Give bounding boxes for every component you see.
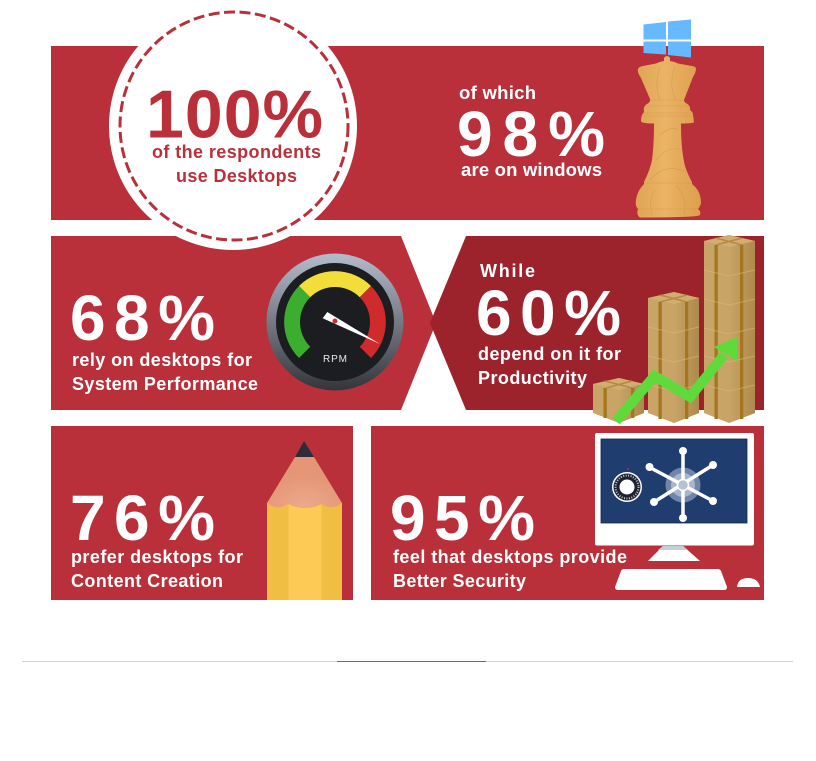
icon: windows logo (644, 20, 691, 58)
icon: stacked boxes (593, 235, 755, 423)
panel: 60% productivity (430, 236, 764, 410)
text: of which: of which (459, 82, 536, 103)
panel: 95% better security (371, 426, 764, 600)
text: Content Creation: Content Creation (71, 571, 223, 591)
text: System Performance: System Performance (72, 374, 258, 394)
arrow: rising green trend (616, 337, 737, 421)
text: prefer desktops for: prefer desktops for (71, 547, 243, 567)
icon: desktop computer with vault (595, 433, 760, 590)
gauge: green arc (284, 286, 310, 358)
footer divider (22, 661, 793, 662)
panel: 98% on windows (51, 20, 764, 220)
icon: pencil (267, 441, 342, 600)
text: Better Security: Better Security (393, 571, 526, 591)
text: Productivity: Productivity (478, 368, 587, 388)
text: use Desktops: use Desktops (176, 166, 297, 186)
gauge: RPM label: RPM (323, 354, 347, 365)
text: of the respondents: of the respondents (152, 142, 321, 162)
vault: wheel (646, 447, 717, 522)
boxes: short stack (593, 378, 644, 423)
stat: 98%: 98% (457, 98, 605, 170)
boxes: medium stack (648, 292, 699, 423)
stat: 100%: 100% (146, 76, 323, 152)
text: are on windows: are on windows (461, 159, 602, 180)
keyboard (615, 569, 727, 590)
icon: chess king (636, 56, 701, 218)
mouse (737, 578, 760, 587)
panel: 76% content creation (51, 426, 353, 600)
stat: 60%: 60% (476, 277, 621, 349)
text: rely on desktops for: rely on desktops for (72, 350, 252, 370)
icon: RPM gauge (266, 254, 404, 390)
text: depend on it for: depend on it for (478, 344, 621, 364)
stat: 95%: 95% (390, 482, 535, 554)
gauge: red arc (360, 286, 386, 358)
text: While: While (480, 261, 535, 281)
panel: 68% system performance (51, 236, 436, 410)
text: feel that desktops provide: feel that desktops provide (393, 547, 627, 567)
gauge: needle (323, 312, 380, 344)
stat: 76%: 76% (70, 482, 215, 554)
boxes: tall stack (704, 235, 755, 423)
gauge: yellow arc (299, 271, 371, 297)
stat: 68%: 68% (70, 282, 215, 354)
vault: dial (612, 468, 642, 502)
panel: 100% circle badge (109, 2, 357, 250)
